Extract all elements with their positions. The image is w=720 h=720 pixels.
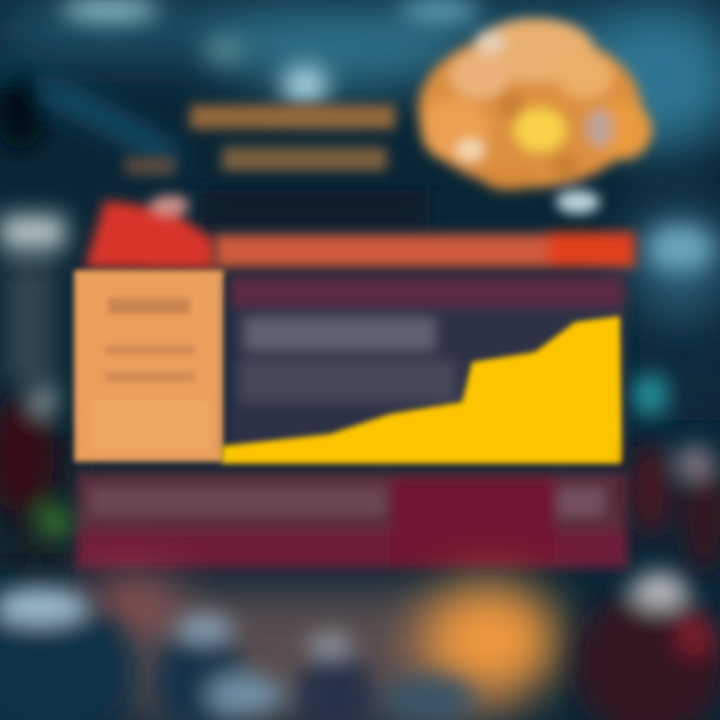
side silhouettes bbox=[0, 386, 720, 570]
red corner tab bbox=[84, 195, 215, 270]
foreground: audience silhouettes bbox=[0, 572, 720, 720]
panel: bottom data table bbox=[76, 472, 628, 568]
chart background bbox=[228, 274, 626, 459]
area chart: yellow bbox=[222, 316, 622, 464]
panel: chart bbox=[222, 274, 626, 464]
panel: left orange summary bbox=[74, 270, 224, 462]
foreground: orange glow bbox=[80, 582, 560, 695]
decorative orange cloud illustration bbox=[418, 18, 652, 214]
header bar bbox=[215, 232, 635, 268]
title bbox=[125, 105, 395, 175]
